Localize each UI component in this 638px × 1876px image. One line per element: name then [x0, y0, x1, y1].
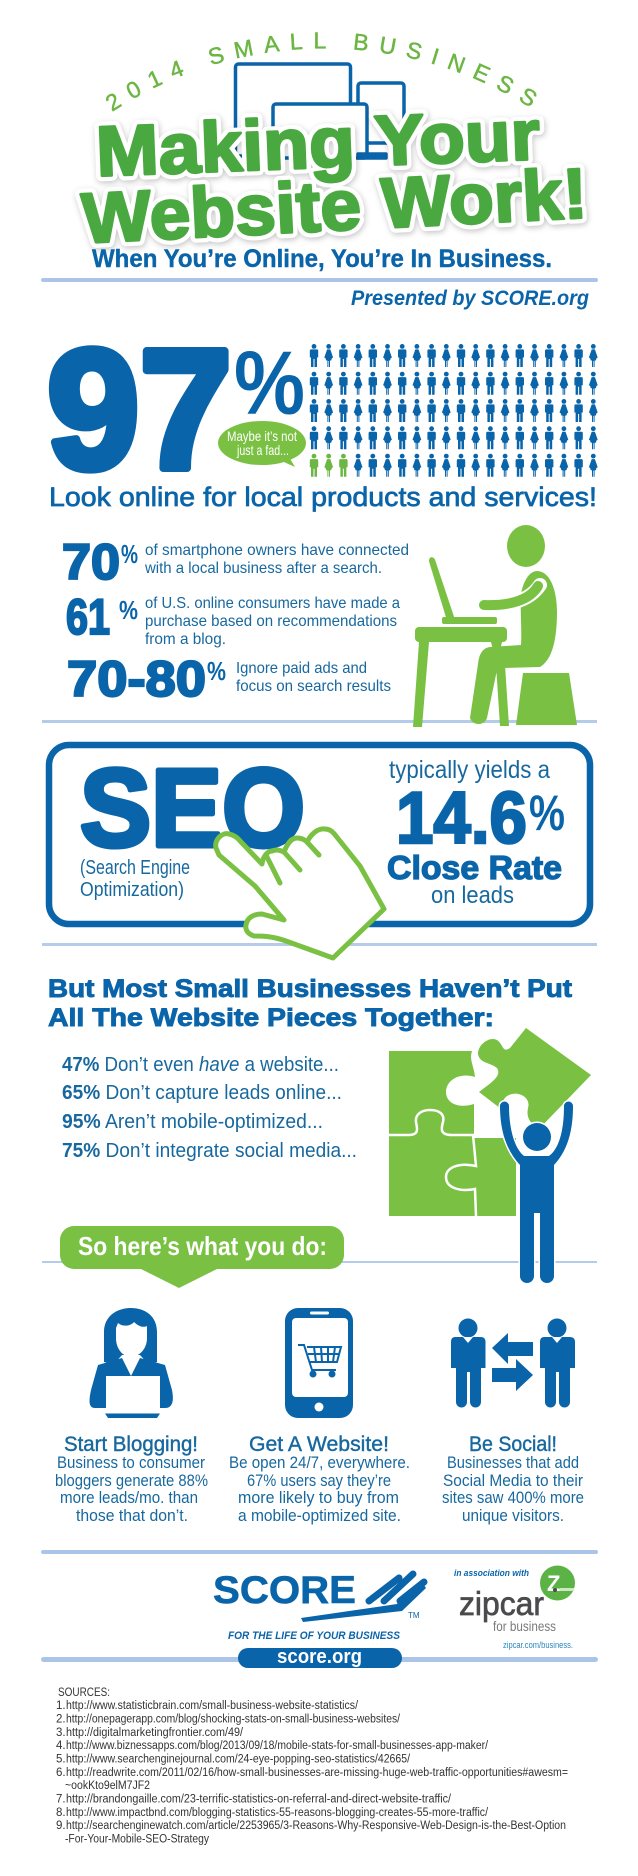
icon: two people exchanging [451, 1318, 575, 1408]
close rate stat: on leads [431, 882, 514, 909]
logo: zipcar: zipcar [459, 1585, 544, 1622]
column: start blogging: more leads/mo. than [60, 1488, 198, 1507]
sources list: 7. [56, 1794, 66, 1806]
column: be social [442, 1433, 584, 1525]
list: missing pieces [62, 1054, 357, 1162]
sources list: http://brandongaille.com/23-terrific-statistics-on-referral-and-direct-website-traffic/ [66, 1794, 452, 1806]
column: get a website: Get A Website! [249, 1433, 389, 1456]
stat: 61%: % [119, 595, 138, 625]
stat: 70%: 70 [62, 534, 120, 590]
heading: website pieces: But Most Small Businesses Haven’t Put [48, 975, 573, 1003]
pill: score.org [238, 1646, 402, 1668]
sources list: http://readwrite.com/2011/02/16/how-small-businesses-are-missing-huge-web-traffic-opportunities#awesm= [66, 1767, 568, 1779]
sources list: 9. [56, 1820, 66, 1832]
list: missing pieces: 65% Don’t capture leads online... [62, 1082, 342, 1104]
icon: pointing hand [216, 829, 384, 958]
banner: so here's what you do: So here’s what you do: [78, 1231, 327, 1261]
header: arched tagline: 2014 SMALL BUSINESS [106, 32, 536, 112]
title line: Making Your: Making Your [95, 96, 541, 192]
pictogram: people grid 97 of 100 [310, 344, 598, 477]
column: get a website: Be open 24/7, everywhere. [229, 1453, 410, 1472]
close rate stat: Close Rate [387, 849, 562, 886]
stat: 61%: from a blog. [145, 631, 226, 648]
sources list: http://searchenginewatch.com/article/2253965/3-Reasons-Why-Responsive-Web-Design-is-the-Best-Option [66, 1820, 566, 1832]
column: get a website: 67% users say they’re [247, 1471, 391, 1490]
figure lifting piece [500, 1102, 573, 1283]
big stat: 97%: % [234, 334, 305, 434]
sources list: http://www.statisticbrain.com/small-business-website-statistics/ [66, 1700, 359, 1712]
stat: 70-80% [67, 651, 391, 707]
column: be social: Social Media to their [443, 1471, 583, 1490]
close rate stat: typically yields a [389, 756, 550, 784]
sources list: http://www.impactbnd.com/blogging-statistics-55-reasons-blogging-creates-55-more-traffic/ [66, 1807, 489, 1819]
list: missing pieces: 95% Aren’t mobile-optimized... [62, 1111, 323, 1133]
sources list: http://digitalmarketingfrontier.com/49/ [66, 1727, 244, 1739]
column: start blogging: bloggers generate 88% [55, 1471, 208, 1490]
title [80, 96, 589, 259]
pill: score.org: score.org [277, 1646, 362, 1668]
heading: website pieces [48, 975, 573, 1032]
sources list: ~ookKto9elM7JF2 [65, 1780, 150, 1792]
callout: speech bubble [218, 421, 306, 467]
icon: devices [236, 64, 404, 171]
sources list: 8. [56, 1807, 66, 1819]
illustration: puzzle pieces and person [389, 1028, 591, 1283]
heading: look online: Look online for local products and services! [49, 482, 597, 512]
list: missing pieces: 47% Don’t even have a website... [62, 1054, 339, 1076]
close rate stat [387, 756, 565, 909]
column: start blogging: Business to consumer [57, 1453, 205, 1472]
stat: 70% [62, 534, 409, 590]
sources list: http://www.searchenginejournal.com/24-eye-popping-seo-statistics/42665/ [66, 1754, 411, 1766]
stat: 61%: of U.S. online consumers have made a [145, 595, 400, 612]
title line: Making Your: Making Your [95, 96, 541, 192]
sources list: 1. [56, 1700, 66, 1712]
logo: SCORE [213, 1569, 426, 1642]
icon: blogger [90, 1308, 173, 1418]
logo: zipcar: in association with [454, 1568, 529, 1578]
stat: 61%: purchase based on recommendations [145, 613, 397, 630]
logo: SCORE: TM [408, 1611, 420, 1620]
sources list: 5. [56, 1754, 66, 1766]
sources list: 6. [56, 1767, 66, 1779]
sources list: 4. [56, 1740, 66, 1752]
logo: zipcar: for business [493, 1618, 556, 1634]
icon: cart [298, 1345, 341, 1376]
sources list: -For-Your-Mobile-SEO-Strategy [65, 1834, 209, 1846]
stat: 70%: with a local business after a search. [144, 560, 382, 577]
column: be social: sites saw 400% more [442, 1488, 584, 1507]
heading: website pieces: All The Website Pieces Together: [48, 1004, 494, 1032]
column: start blogging: those that don’t. [76, 1506, 188, 1525]
SEO wordmark: SEO [80, 747, 305, 870]
callout: speech bubble: just a fad... [236, 442, 289, 458]
stat: 70%: of smartphone owners have connected [145, 542, 409, 559]
column: be social: unique visitors. [462, 1506, 564, 1525]
logo: SCORE: SCORE [213, 1569, 356, 1612]
big stat: 97%: 97 [47, 315, 232, 505]
icon: smartphone with cart [285, 1308, 353, 1418]
sources list: 2. [56, 1714, 66, 1726]
close rate stat: 14.6 [396, 778, 527, 859]
sources list: http://onepagerapp.com/blog/shocking-stats-on-small-business-websites/ [66, 1714, 401, 1726]
presented by: Presented by SCORE.org [351, 287, 589, 310]
close rate stat: % [529, 785, 565, 841]
column: start blogging: Start Blogging! [64, 1433, 198, 1456]
sources list: 3. [56, 1727, 66, 1739]
panel: SEO [49, 745, 590, 924]
logo: zipcar: Z [547, 1571, 560, 1596]
title line: Website Work!: Website Work! [80, 154, 589, 259]
column: be social: Be Social! [469, 1433, 557, 1456]
stat: 61% [66, 589, 400, 648]
stat: 70-80%: focus on search results [236, 678, 391, 695]
column: get a website [229, 1433, 410, 1525]
column: get a website: more likely to buy from [238, 1488, 399, 1507]
stat: 70-80%: % [207, 656, 226, 686]
callout: speech bubble: Maybe it’s not [227, 428, 297, 444]
stat: 70-80%: Ignore paid ads and [236, 660, 367, 677]
sources list [56, 1687, 568, 1846]
column: get a website: a mobile-optimized site. [238, 1506, 401, 1525]
stat: 70-80%: 70-80 [67, 651, 206, 707]
stat: 70%: % [121, 539, 138, 569]
column: start blogging [55, 1433, 208, 1525]
column: be social: Businesses that add [447, 1453, 579, 1472]
logo: zipcar: zipcar.com/business. [503, 1640, 573, 1650]
title line: Website Work!: Website Work! [80, 154, 589, 259]
logo: zipcar [454, 1566, 575, 1650]
list: missing pieces: 75% Don’t integrate social media... [62, 1140, 357, 1162]
sources list: http://www.biznessapps.com/blog/2013/09/18/mobile-stats-for-small-businesses-app-maker/ [66, 1740, 489, 1752]
SEO definition: Optimization) [80, 879, 184, 901]
banner: so here's what you do [60, 1226, 344, 1288]
subtitle: When You’re Online, You’re In Business. [92, 245, 552, 273]
sources list: SOURCES: [58, 1687, 110, 1699]
icon: person at laptop [413, 525, 577, 727]
stat: 61%: 61 [66, 589, 110, 645]
logo: SCORE: FOR THE LIFE OF YOUR BUSINESS [228, 1630, 401, 1642]
SEO definition: (Search Engine [80, 857, 190, 879]
